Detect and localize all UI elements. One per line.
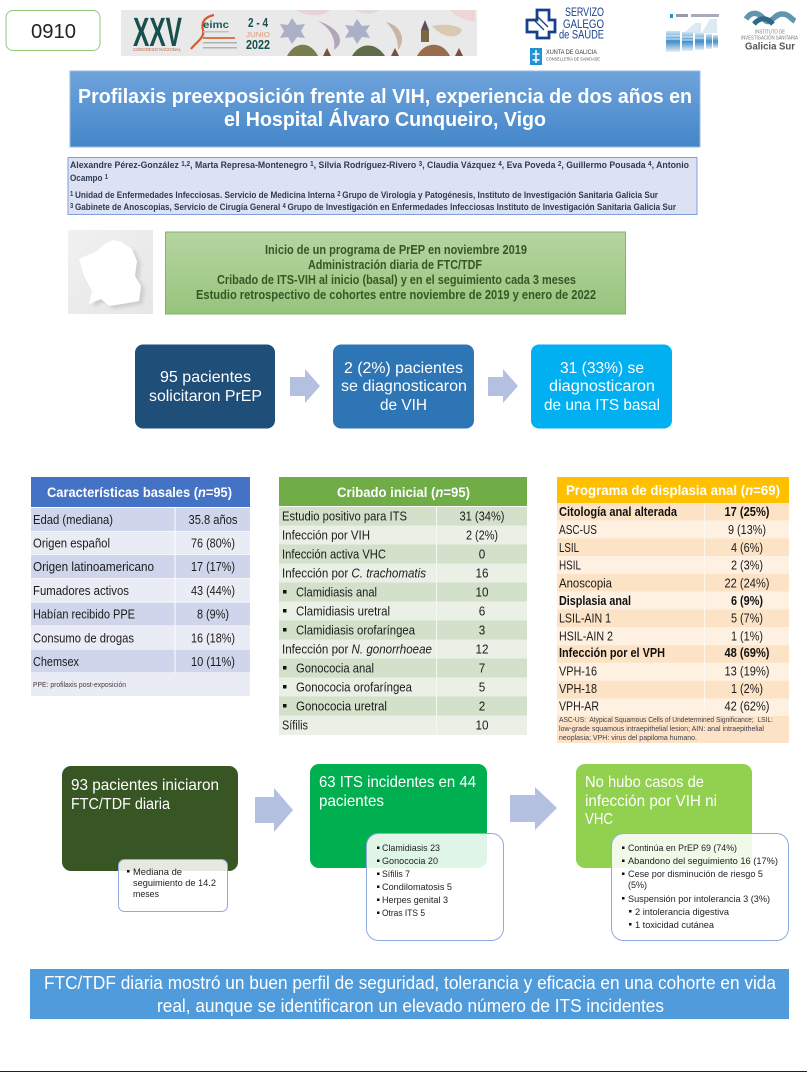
congress banner bbox=[121, 9, 477, 56]
logo: institutional building graphic bbox=[666, 14, 719, 52]
table: initial screening: Clamidiasis anal bbox=[296, 584, 377, 600]
table: baseline characteristics: Habían recibido PPE bbox=[33, 606, 135, 622]
table: anal dysplasia programme: 4 (6%) bbox=[731, 540, 763, 555]
outcome box: incident STIs bbox=[310, 764, 504, 940]
authors and affiliations: , Claudia Vázquez bbox=[422, 160, 498, 171]
table: initial screening: Infección por C. trachomatis bbox=[282, 566, 426, 580]
table: anal dysplasia programme: 1 (2%) bbox=[731, 681, 763, 696]
flow box: HIV diagnoses: de VIH bbox=[380, 397, 427, 414]
conclusion banner: real, aunque se identificaron un elevado número de ITS incidentes bbox=[157, 996, 664, 1016]
callout: STI breakdown: Clamidiasis 23 bbox=[382, 843, 440, 854]
authors and affiliations: , Antonio bbox=[652, 160, 689, 171]
table: baseline characteristics: Origen español bbox=[33, 536, 110, 550]
table: initial screening: 5 bbox=[479, 680, 485, 694]
callout: follow-up: Mediana de bbox=[133, 867, 182, 878]
table: anal dysplasia programme bbox=[557, 477, 789, 743]
table: initial screening: Sífilis bbox=[282, 718, 308, 732]
table: initial screening: 2 (2%) bbox=[466, 528, 498, 542]
table footnote: ASC-US: Atypical Squamous Cells of Undetermined Significance; LSIL: bbox=[559, 717, 773, 724]
table: anal dysplasia programme: 2 (3%) bbox=[731, 558, 763, 572]
table: initial screening: 31 (34%) bbox=[460, 508, 504, 524]
congress banner: XXV bbox=[133, 9, 182, 55]
logo: Xunta de Galicia: CONSELLERÍA DE SANIDADE bbox=[546, 56, 600, 62]
callout: STI breakdown: Herpes genital 3 bbox=[382, 895, 448, 906]
callout: retention and discontinuation: (5%) bbox=[628, 880, 647, 891]
authors and affiliations: Grupo de Investigación en Enfermedades Infecciosas Instituto de Investigación Sanitaria Galicia Sur bbox=[287, 202, 676, 213]
table: anal dysplasia programme: VPH-16 bbox=[559, 664, 597, 678]
flow box: patients requesting PrEP bbox=[135, 344, 275, 428]
flow box: HIV diagnoses: se diagnosticaron bbox=[341, 378, 467, 395]
panel: study design: Cribado de ITS-VIH al inicio (basal) y en el seguimiento cada 3 meses bbox=[217, 273, 576, 287]
table: anal dysplasia programme: 13 (19%) bbox=[724, 664, 770, 678]
callout: retention and discontinuation: Suspensión por intolerancia 3 (3%) bbox=[628, 894, 770, 905]
authors and affiliations: 3 bbox=[70, 203, 75, 210]
outcome box: no HIV or HCV infections: No hubo casos de bbox=[585, 774, 704, 791]
flow box: patients requesting PrEP: solicitaron PrEP bbox=[149, 388, 262, 405]
outcome box: incident STIs: 63 ITS incidentes en 44 bbox=[319, 774, 476, 791]
logo: Xunta de Galicia bbox=[530, 48, 600, 65]
table: initial screening: Estudio positivo para ITS bbox=[282, 508, 407, 524]
table heading: Características basales (n=95) bbox=[47, 485, 232, 500]
authors and affiliations: 4 bbox=[282, 203, 287, 210]
outcome box: incident STIs: pacientes bbox=[319, 793, 384, 810]
panel: study design bbox=[166, 232, 626, 314]
callout: retention and discontinuation: Cese por disminución de riesgo 5 bbox=[628, 869, 763, 880]
outcome box: no HIV or HCV infections bbox=[576, 764, 788, 940]
callout: retention and discontinuation: Continúa en PrEP 69 (74%) bbox=[628, 843, 737, 854]
logo: Instituto de Investigación Sanitaria Galicia Sur bbox=[741, 13, 799, 52]
table: anal dysplasia programme: LSIL-AIN 1 bbox=[559, 610, 611, 626]
table: anal dysplasia programme: 48 (69%) bbox=[724, 645, 770, 660]
table: baseline characteristics: 43 (44%) bbox=[191, 583, 235, 598]
flow box: baseline STI diagnoses: diagnosticaron bbox=[549, 378, 655, 395]
table: anal dysplasia programme: Infección por el VPH bbox=[559, 645, 665, 660]
logo: Instituto de Investigación Sanitaria Galicia Sur: INSTITUTO DE bbox=[755, 30, 786, 36]
authors and affiliations: 4 bbox=[498, 161, 502, 168]
panel: study design: Estudio retrospectivo de cohortes entre noviembre de 2019 y enero de 2022 bbox=[196, 288, 596, 302]
table: initial screening: Infección activa VHC bbox=[282, 546, 386, 562]
callout: STI breakdown: Otras ITS 5 bbox=[382, 908, 425, 919]
logo: Servizo Galego de Saúde: SERVIZO bbox=[565, 7, 604, 19]
title: Profilaxis preexposición frente al VIH, experiencia de dos años en bbox=[78, 86, 692, 108]
table: initial screening: Gonococia orofaríngea bbox=[296, 680, 413, 694]
table: baseline characteristics bbox=[31, 477, 250, 696]
flow box: patients requesting PrEP: 95 pacientes bbox=[160, 369, 251, 386]
authors and affiliations: Alexandre Pérez-González bbox=[70, 160, 190, 171]
table heading: Cribado inicial (n=95) bbox=[337, 485, 470, 500]
table: initial screening: 6 bbox=[479, 604, 485, 618]
table: baseline characteristics: 35.8 años bbox=[188, 512, 238, 527]
callout: STI breakdown bbox=[366, 834, 504, 940]
congress banner: 2022 bbox=[246, 37, 270, 52]
callout: retention and discontinuation: Abandono del seguimiento 16 (17%) bbox=[628, 856, 778, 867]
table footnote: PPE: profilaxis post-exposición bbox=[33, 682, 126, 689]
table: anal dysplasia programme: 9 (13%) bbox=[728, 522, 766, 537]
authors and affiliations: 3 bbox=[419, 161, 422, 168]
callout: retention and discontinuation: 2 intolerancia digestiva bbox=[635, 907, 730, 918]
abstract number badge bbox=[6, 10, 100, 50]
table: anal dysplasia programme: Citología anal alterada bbox=[559, 504, 678, 519]
table: baseline characteristics: 8 (9%) bbox=[197, 606, 229, 622]
table: anal dysplasia programme: LSIL bbox=[559, 540, 579, 555]
table: initial screening: Infección por N. gonorrhoeae bbox=[282, 642, 432, 656]
authors and affiliations bbox=[68, 158, 697, 214]
authors and affiliations: Unidad de Enfermedades Infecciosas. Servicio de Medicina Interna bbox=[75, 190, 337, 201]
table: initial screening: 3 bbox=[479, 622, 485, 638]
table: initial screening: 12 bbox=[476, 642, 488, 656]
title: el Hospital Álvaro Cunqueiro, Vigo bbox=[224, 108, 546, 131]
table footnote: low-grade squamous intraepithelial lesion; AIN: anal intraepithelial bbox=[559, 726, 764, 733]
table: anal dysplasia programme: ASC-US bbox=[559, 522, 597, 537]
flow box: baseline STI diagnoses: de una ITS basal bbox=[544, 397, 660, 414]
callout: follow-up: meses bbox=[133, 889, 159, 900]
logo: Servizo Galego de Saúde: GALEGO bbox=[563, 19, 604, 31]
callout: retention and discontinuation bbox=[612, 834, 788, 940]
table footnote bbox=[559, 717, 773, 742]
authors and affiliations: 4 bbox=[648, 161, 652, 168]
table: initial screening: Clamidiasis uretral bbox=[296, 604, 390, 618]
flow box: baseline STI diagnoses: 31 (33%) se bbox=[560, 360, 644, 377]
table: baseline characteristics: Origen latinoamericano bbox=[33, 559, 154, 574]
arrow bbox=[488, 369, 518, 403]
flow box: HIV diagnoses: 2 (2%) pacientes bbox=[344, 360, 463, 377]
congress banner: JUNIO bbox=[246, 30, 270, 39]
table: anal dysplasia programme: VPH-18 bbox=[559, 681, 597, 696]
logo: Instituto de Investigación Sanitaria Galicia Sur: Galicia Sur bbox=[745, 42, 795, 52]
table footnote: neoplasia; VPH: virus del papiloma humano. bbox=[559, 735, 697, 742]
table: baseline characteristics: 76 (80%) bbox=[191, 536, 235, 550]
callout: follow-up bbox=[118, 860, 228, 912]
table: initial screening: Clamidiasis orofaríngea bbox=[296, 622, 416, 638]
table: anal dysplasia programme: 42 (62%) bbox=[724, 698, 770, 714]
authors and affiliations: 2 bbox=[558, 161, 562, 168]
table: initial screening: Gonococia anal bbox=[296, 660, 374, 676]
outcome box: no HIV or HCV infections: VHC bbox=[585, 811, 613, 828]
table: baseline characteristics: 10 (11%) bbox=[191, 654, 235, 669]
congress banner: CONGRESO NACIONAL bbox=[133, 47, 181, 52]
congress banner: eimc bbox=[203, 20, 229, 31]
arrow bbox=[290, 369, 320, 403]
authors and affiliations: Gabinete de Anoscopias, Servicio de Cirugía General bbox=[75, 202, 282, 213]
table: initial screening: 10 bbox=[476, 718, 488, 732]
table: anal dysplasia programme: 1 (1%) bbox=[731, 628, 763, 644]
table: anal dysplasia programme: Displasia anal bbox=[559, 593, 631, 608]
table: initial screening: Gonococia uretral bbox=[296, 698, 387, 714]
outcome box: no HIV or HCV infections: infección por VIH ni bbox=[585, 793, 717, 810]
table: baseline characteristics: Edad (mediana) bbox=[33, 512, 113, 527]
table: anal dysplasia programme: HSIL bbox=[559, 558, 581, 572]
table: anal dysplasia programme: VPH-AR bbox=[559, 698, 599, 714]
outcome box: patients started FTC/TDF: FTC/TDF diaria bbox=[71, 796, 170, 813]
table: baseline characteristics: Chemsex bbox=[33, 654, 79, 669]
authors and affiliations: 1 bbox=[105, 174, 108, 181]
table: initial screening bbox=[279, 477, 527, 735]
table: baseline characteristics: 16 (18%) bbox=[191, 630, 235, 646]
flow box: baseline STI diagnoses bbox=[531, 344, 672, 428]
logo: Xunta de Galicia: XUNTA DE GALICIA bbox=[546, 50, 597, 56]
table: initial screening: 16 bbox=[476, 566, 488, 580]
logo: Servizo Galego de Saúde bbox=[527, 7, 604, 42]
table: anal dysplasia programme: Anoscopia bbox=[559, 576, 613, 590]
authors and affiliations: 1 bbox=[310, 161, 314, 168]
callout: follow-up: seguimiento de 14.2 bbox=[133, 878, 216, 889]
table: anal dysplasia programme: HSIL-AIN 2 bbox=[559, 628, 613, 644]
authors and affiliations: , Guillermo Pousada bbox=[561, 160, 648, 171]
flow box: HIV diagnoses bbox=[333, 344, 474, 428]
callout: retention and discontinuation: 1 toxicidad cutánea bbox=[635, 920, 715, 931]
authors and affiliations: , Marta Represa-Montenegro bbox=[190, 160, 310, 171]
authors and affiliations: Ocampo bbox=[70, 173, 108, 184]
authors and affiliations: , Silvia Rodríguez-Rivero bbox=[314, 160, 419, 171]
table: baseline characteristics: Fumadores activos bbox=[33, 583, 129, 598]
callout: STI breakdown: Gonococia 20 bbox=[382, 856, 438, 867]
authors and affiliations: 1 bbox=[70, 191, 75, 198]
table: initial screening: 7 bbox=[479, 660, 485, 676]
authors and affiliations: , Eva Poveda bbox=[502, 160, 558, 171]
congress banner: 2 - 4 bbox=[248, 16, 268, 30]
outcome box: patients started FTC/TDF: 93 pacientes iniciaron bbox=[71, 777, 219, 794]
abstract number badge: 0910 bbox=[31, 21, 76, 43]
table: initial screening: 2 bbox=[479, 698, 485, 714]
authors and affiliations: Grupo de Virología y Patogénesis, Instituto de Investigación Sanitaria Galicia Sur bbox=[342, 190, 658, 201]
table: anal dysplasia programme: 17 (25%) bbox=[724, 504, 770, 519]
arrow bbox=[510, 787, 557, 830]
outcome box: patients started FTC/TDF bbox=[62, 766, 238, 912]
title bbox=[70, 71, 700, 147]
callout: STI breakdown: Sífilis 7 bbox=[382, 869, 410, 880]
arrow bbox=[255, 788, 293, 832]
table: baseline characteristics: Consumo de drogas bbox=[33, 630, 134, 646]
logo: Instituto de Investigación Sanitaria Galicia Sur: INVESTIGACIÓN SANITARIA bbox=[741, 34, 799, 42]
icon: map of Galicia bbox=[68, 230, 153, 314]
table: anal dysplasia programme: 22 (24%) bbox=[724, 576, 770, 590]
table heading: Programa de displasia anal (n=69) bbox=[566, 483, 780, 498]
table: initial screening: 10 bbox=[476, 584, 488, 600]
authors and affiliations: 2 bbox=[337, 191, 342, 198]
conclusion banner: FTC/TDF diaria mostró un buen perfil de seguridad, tolerancia y eficacia en una cohorte en vida bbox=[44, 973, 777, 993]
table: anal dysplasia programme: 6 (9%) bbox=[731, 593, 763, 608]
table: baseline characteristics: 17 (17%) bbox=[191, 559, 235, 574]
table: initial screening: Infección por VIH bbox=[282, 528, 370, 542]
callout: STI breakdown: Condilomatosis 5 bbox=[382, 882, 452, 893]
conclusion banner bbox=[30, 969, 789, 1019]
table: anal dysplasia programme: 5 (7%) bbox=[731, 610, 763, 626]
panel: study design: Inicio de un programa de PrEP en noviembre 2019 bbox=[265, 243, 527, 257]
logo: Servizo Galego de Saúde: de SAÚDE bbox=[559, 28, 604, 42]
authors and affiliations: 1,2 bbox=[181, 161, 190, 168]
panel: study design: Administración diaria de FTC/TDF bbox=[308, 258, 482, 272]
table: initial screening: 0 bbox=[479, 546, 485, 562]
